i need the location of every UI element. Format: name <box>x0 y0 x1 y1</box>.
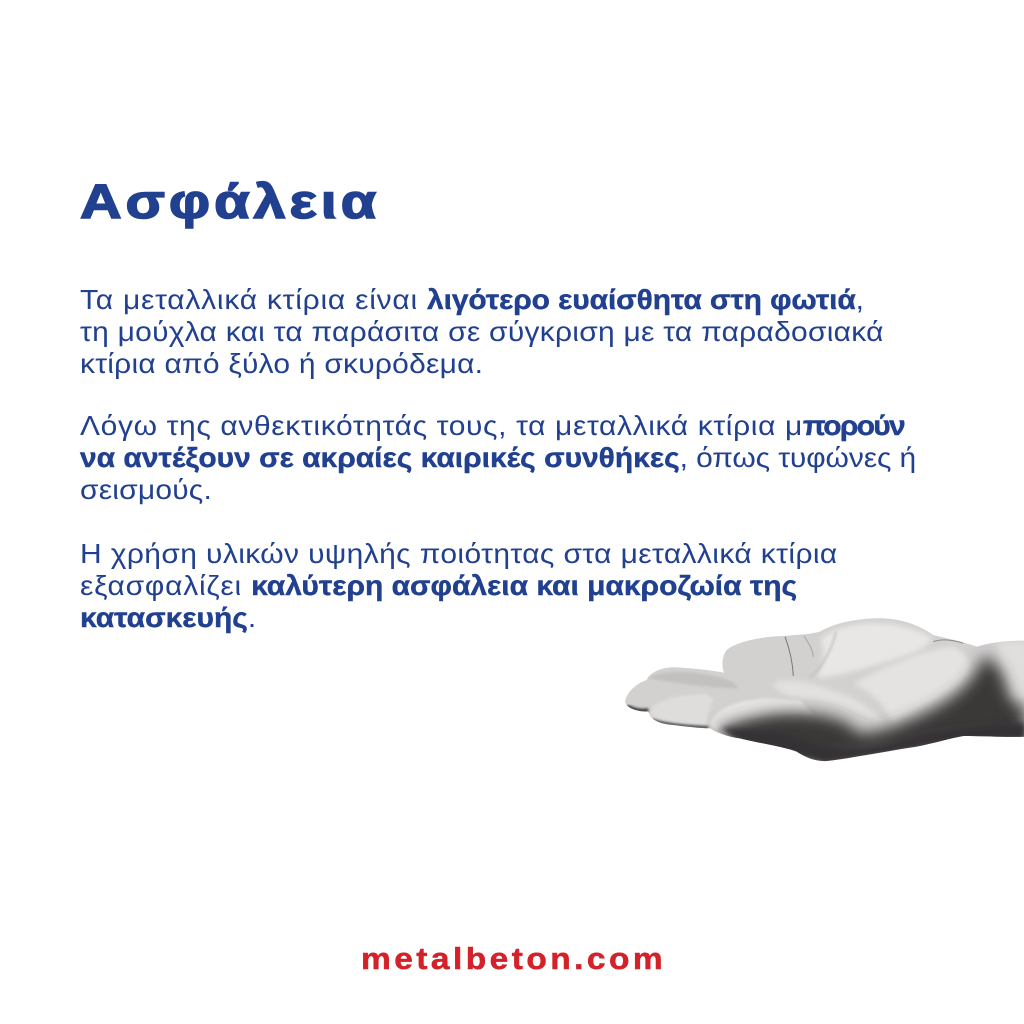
text block: paragraph 3: εξασφαλίζει καλύτερη ασφάλεια και μακροζωία της <box>80 570 797 601</box>
text block: paragraph 1: κτίρια από ξύλο ή σκυρόδεμα. <box>80 348 483 379</box>
text block: paragraph 1: Τα μεταλλικά κτίρια είναι λιγότερο ευαίσθητα στη φωτιά, <box>80 284 865 315</box>
icon: open hand photograph <box>625 618 1024 762</box>
text block: paragraph 2: να αντέξουν σε ακραίες καιρικές συνθήκες, όπως τυφώνες ή <box>80 442 916 473</box>
title: Ασφάλεια <box>80 176 380 229</box>
text block: paragraph 2: σεισμούς. <box>80 474 212 505</box>
text block: paragraph 2 <box>80 410 916 505</box>
text block: paragraph 3: Η χρήση υλικών υψηλής ποιότητας στα μεταλλικά κτίρια <box>80 538 838 569</box>
footer: website: metalbeton.com <box>361 941 666 976</box>
text block: paragraph 1 <box>80 284 884 379</box>
text block: paragraph 3 <box>80 538 838 634</box>
text block: paragraph 3: κατασκευής. <box>80 602 256 633</box>
text block: paragraph 2: Λόγω της ανθεκτικότητάς τους, τα μεταλλικά κτίρια μπορούν <box>80 410 904 441</box>
text block: paragraph 1: τη μούχλα και τα παράσιτα σε σύγκριση με τα παραδοσιακά <box>80 316 884 347</box>
